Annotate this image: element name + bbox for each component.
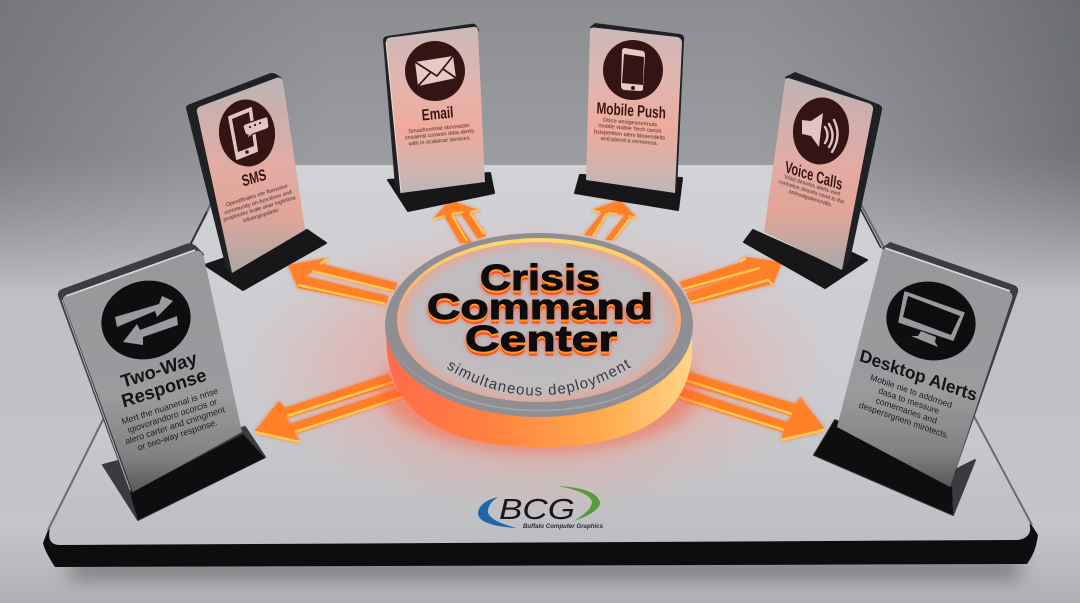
heading: Two-Way Response: Response [119, 364, 209, 412]
heading: Crisis Command Center: Crisis [480, 257, 600, 298]
heading: Crisis Command Center: Command [427, 286, 653, 327]
heading: Crisis Command Center: Command [427, 289, 653, 330]
icon: envelope [405, 41, 465, 101]
logo: BCG Buffalo Computer Graphics: Buffalo Computer Graphics [523, 523, 604, 530]
logo: BCG Buffalo Computer Graphics: BCG [499, 494, 575, 526]
icon: phone with speech bubble [216, 97, 278, 169]
text: Two-Way description: Mert the nuanenal is nrise [120, 385, 219, 427]
heading: SMS: SMS [240, 167, 268, 190]
heading: Crisis Command Center: Center [465, 322, 617, 363]
panel: Voice Calls [744, 72, 882, 288]
text: Email description [404, 122, 475, 148]
text: Voice Calls description: connoton desotts cood to the [778, 179, 845, 206]
central hub: Crisis Command Center [374, 233, 706, 459]
text: Desktop description: comernaries and [875, 395, 938, 426]
text: Mobile Push description: and plarvil a oemeresa. [600, 136, 659, 147]
text: Two-Way description: or two-way response. [137, 417, 219, 453]
text: Desktop description: despersrgnem mirotects. [858, 400, 950, 441]
heading: Voice Calls: Voice Calls [784, 158, 843, 194]
heading: Two-Way Response [114, 346, 209, 412]
text: Mobile Push description [594, 117, 666, 148]
heading: Email: Email [421, 104, 454, 125]
arrow: to Desktop Alerts [675, 372, 824, 441]
text: Two-Way description: alero carter and cningment [124, 404, 226, 446]
arrow: to Voice Calls [680, 257, 782, 304]
text: SMS description: propinctec leate anar ingleboa [223, 195, 297, 224]
text: Email description: cnaaeral conwan data alerts [405, 129, 474, 142]
heading: Crisis Command Center: Command [427, 288, 653, 329]
panel: Desktop Alerts [814, 242, 1018, 515]
text: Desktop description [858, 371, 957, 441]
arrow: to Email [433, 200, 486, 243]
text: Desktop description: dasa to messure [877, 385, 940, 416]
text: Email description: with in ocalaicar aivoices. [407, 135, 472, 148]
platform [43, 165, 1038, 580]
panel: Mobile Push [575, 23, 684, 210]
text: Mobile Push description: mobile visible Yech cansit [598, 123, 662, 135]
text: Two-Way description: igiovorandoro ocorcis or [126, 396, 218, 435]
subtitle: simultaneous deployment: simultaneous deployment [447, 360, 631, 396]
heading: Crisis Command Center: Crisis [480, 259, 600, 300]
panel: SMS [186, 73, 326, 290]
text: Email description: Smashcormat obnovaste [408, 123, 470, 135]
logo: BCG Buffalo Computer Graphics [478, 486, 604, 530]
text: Voice Calls description [777, 173, 845, 212]
icon: speaker [790, 95, 852, 167]
cables behind panels [190, 208, 881, 248]
heading: Crisis Command Center: Command [427, 290, 653, 331]
text: SMS description: community on-functions and [224, 189, 292, 216]
text: SMS description: Opentifeates ete flanwave [225, 183, 288, 209]
text: SMS description [220, 182, 298, 230]
heading: Crisis Command Center [427, 257, 653, 363]
arrow: to SMS [288, 258, 397, 305]
icon: desktop monitor [877, 272, 985, 370]
panel: Two-Way Response [58, 243, 265, 520]
text: Voice Calls description: Voiot desotos alerts vant [784, 174, 841, 198]
icon: two-way arrows [92, 271, 200, 369]
panel: Email [383, 24, 494, 211]
arrow: to Mobile Push [584, 200, 637, 240]
text: Voice Calls description: anlevaigatencnalls. [788, 189, 833, 209]
text: SMS description: infuengopdinto [243, 208, 279, 224]
heading: Two-Way Response: Two-Way [119, 347, 200, 392]
text: Desktop description: Mobile nie to addrroed [869, 372, 953, 410]
icon: smartphone [603, 40, 663, 100]
text: Mobile Push description: bsisperition alerv bloxendeits [594, 129, 665, 142]
arrow: to Two-Way Response [255, 374, 405, 443]
heading: Crisis Command Center: Crisis [480, 261, 600, 302]
heading: Crisis Command Center: Crisis [480, 261, 600, 302]
heading: Desktop Alerts: Desktop Alerts [858, 345, 979, 405]
heading: Crisis Command Center: Center [465, 321, 617, 362]
heading: Crisis Command Center: Center [465, 320, 617, 361]
text: Two-Way description [119, 385, 229, 456]
heading: Crisis Command Center: Center [465, 318, 617, 359]
heading: Mobile Push: Mobile Push [596, 100, 666, 122]
text: Mobile Push description: Disce aesigesnonnuts [603, 118, 657, 128]
